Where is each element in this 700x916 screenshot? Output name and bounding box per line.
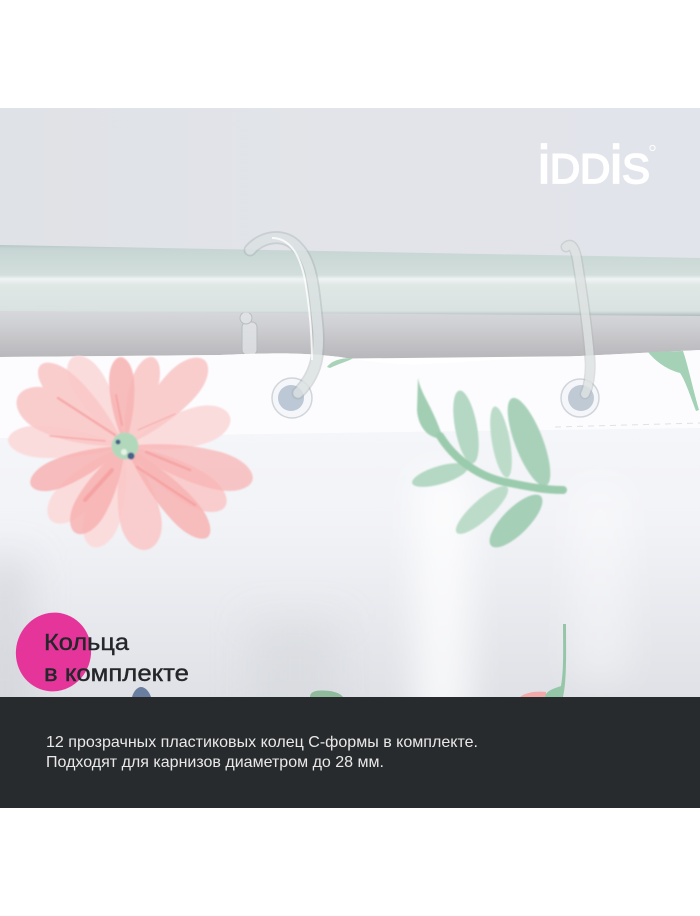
dark caption band <box>0 697 700 808</box>
heading text: в комплекте <box>44 660 189 686</box>
print fragments at bottom edge <box>132 624 566 697</box>
partial leaf, under first ring <box>327 358 354 368</box>
top hem <box>0 350 700 438</box>
hem stitching <box>555 423 700 427</box>
far ring behind the rod <box>240 312 257 355</box>
leaf print <box>410 378 563 555</box>
heading text: Кольца <box>44 629 129 655</box>
curtain rod <box>0 245 700 316</box>
registered mark <box>650 145 655 151</box>
photo: curtain rod and shower curtain <box>0 108 700 730</box>
caption text: 12 прозрачных пластиковых колец С-формы в комплекте. <box>46 734 478 751</box>
ring 2 with eyelet <box>561 245 599 417</box>
partial leaf, top right <box>648 351 699 411</box>
pink blob <box>7 604 100 700</box>
caption text <box>46 734 478 771</box>
curtain fabric <box>0 350 700 730</box>
fabric folds <box>0 470 630 730</box>
shadow below rod <box>0 305 700 362</box>
flower centre <box>112 432 138 460</box>
logo: iDDiS: iDDiS <box>538 135 650 195</box>
petal streaks <box>50 395 195 505</box>
wall backdrop <box>0 108 700 258</box>
flower print <box>7 348 257 554</box>
ring 1 with eyelet <box>250 238 318 418</box>
caption text: Подходят для карнизов диаметром до 28 мм. <box>46 754 384 771</box>
heading text <box>44 629 189 686</box>
heading with pink blob <box>7 604 189 700</box>
